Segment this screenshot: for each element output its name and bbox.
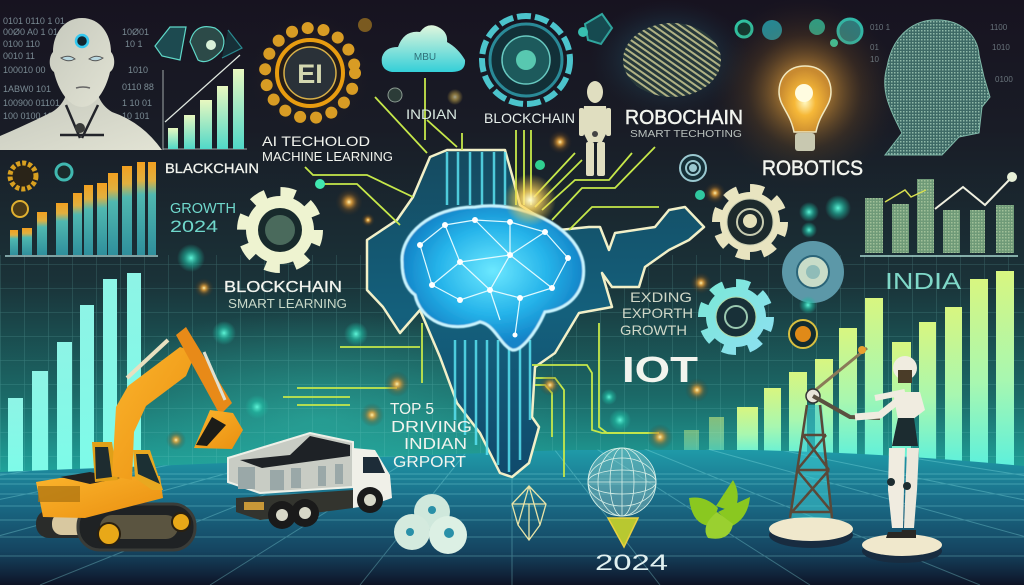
transmission tower on disc [769, 346, 867, 548]
label: exding export growth: GROWTH [620, 322, 687, 338]
third eye [76, 35, 88, 47]
icon: target rings [680, 155, 706, 181]
truck cab [353, 448, 392, 508]
robot head [893, 356, 917, 380]
icon: gold AI emblem [250, 13, 370, 133]
label: growth 2024 [170, 200, 236, 236]
main track [78, 504, 195, 550]
label: exding export growth: EXPORTH [622, 305, 693, 321]
icon: circuit head profile: 1010 [992, 43, 1010, 52]
humanoid robot on disc [813, 356, 942, 563]
label: robochain: ROBOCHAIN [625, 107, 743, 129]
wheels [268, 487, 383, 529]
robot head [50, 18, 114, 107]
robot shoulders [0, 95, 162, 150]
icon: blue medallion [782, 241, 844, 303]
icons: three white orbs [394, 494, 467, 554]
label: exding export growth: EXDING [630, 289, 692, 305]
label: top 5 driving indian export: GRPORT [393, 454, 466, 471]
emblem glyph: EI [297, 59, 323, 89]
icon: orange ring [789, 320, 817, 348]
label: blockchain lower: BLOCKCHAIN [224, 279, 342, 296]
icon: gold gear [10, 163, 36, 189]
icon: wire sphere [588, 448, 656, 516]
icon: circuit head profile: 1100 [990, 23, 1008, 32]
cab [92, 442, 118, 482]
label: 2024: 2024 [595, 550, 668, 575]
text labels [165, 106, 962, 575]
bar chart: India panel [860, 172, 1018, 256]
binary data text: 1ABW0 101 [3, 84, 51, 94]
label: smart technoting: SMART TECHOTING [630, 129, 742, 140]
label: top 5 driving indian export: DRIVING [391, 419, 472, 436]
icon: gold ring [12, 201, 28, 217]
label: exding export growth [620, 289, 693, 338]
bucket [194, 410, 243, 449]
label: blockchain top: BLOCKCHAIN [484, 110, 575, 126]
binary data text: 10 101 [122, 111, 150, 121]
robot collar [60, 105, 104, 138]
roller [52, 513, 107, 535]
label: top 5 driving indian export: TOP 5 [390, 401, 434, 418]
icon: crystal shapes [155, 27, 242, 62]
icon: cloud: MBU [414, 52, 436, 63]
label: indian: INDIAN [406, 106, 457, 122]
binary data text: 0100 110 [3, 39, 40, 49]
icon: wireframe diamond [512, 486, 546, 540]
small growth bar chart [163, 55, 247, 150]
label: growth 2024: 2024 [170, 217, 218, 236]
label: IoT: IOT [622, 349, 698, 390]
excavator body [36, 476, 163, 518]
glow: yellow spark [504, 174, 556, 226]
brain with neural network [402, 206, 584, 350]
mini chart with orange tops [5, 162, 158, 256]
icon: circuit head profile: 10 [870, 55, 879, 64]
binary data text: 0101 0110 1 01 [3, 16, 65, 26]
binary data text: 1010 [128, 65, 148, 75]
icon: circuit head profile: 010 1 [870, 23, 891, 32]
binary data text [3, 16, 154, 121]
binary data text: 100 0100 110 [3, 111, 57, 121]
binary data text: 00Ø0 A0 1 01 [3, 27, 58, 37]
truck chassis [236, 490, 353, 520]
boom [112, 347, 196, 480]
icon: circuit head profile: 0100 [995, 75, 1013, 84]
circuit lines [283, 78, 659, 477]
icon: small humanoid robot [579, 81, 611, 176]
icon: green clover leaf [689, 480, 750, 539]
tower arm [813, 348, 867, 392]
icon: cloud [382, 25, 465, 72]
label: machine learning: MACHINE LEARNING [262, 149, 393, 164]
icon: blockchain wheel [482, 16, 570, 104]
floor with perspective grid [0, 449, 1024, 585]
binary data text: 0010 11 [3, 51, 35, 61]
label: top 5 driving indian export [390, 401, 472, 471]
label: india: INDIA [885, 268, 962, 294]
icon: teal ring [56, 164, 72, 180]
gear: cream right [718, 190, 782, 254]
left aqua bar chart [8, 273, 141, 475]
icon: yellow gem [608, 518, 638, 547]
robot arm reaching [813, 396, 880, 418]
background grid [0, 255, 1024, 470]
icon: fingerprint circuit brain [590, 0, 750, 116]
dump truck [228, 433, 392, 529]
background glow [60, 310, 580, 530]
binary data text: 100010 00 [3, 65, 46, 75]
label: growth 2024: GROWTH [170, 200, 236, 217]
icon: light bulb [710, 0, 900, 187]
engine cover [60, 472, 120, 484]
vertical data lines [447, 152, 530, 472]
label: AI technolod: AI TECHOLOD [262, 133, 370, 149]
binary data text: 10Ø01 [122, 27, 149, 37]
truck bed [228, 433, 353, 493]
right lime bar chart [684, 271, 1014, 468]
rear track [36, 510, 96, 538]
icons: teal status dots [736, 19, 862, 47]
glowing nodes [166, 18, 851, 450]
icon: teal shield [578, 14, 612, 44]
panel: robot portrait with binary data [0, 16, 162, 150]
binary data text: 100900 01101 [3, 98, 60, 108]
label: robotics: ROBOTICS [762, 157, 863, 180]
icon: circuit head profile [870, 20, 1013, 155]
robot torso [892, 392, 925, 445]
icon: circuit head profile: 01 [870, 43, 879, 52]
binary data text: 10 1 [125, 39, 143, 49]
label: blackchain: BLACKCHAIN [165, 160, 259, 176]
binary data text: 0110 88 [122, 82, 154, 92]
arm [176, 327, 232, 415]
label: smart learning: SMART LEARNING [228, 296, 347, 311]
label: top 5 driving indian export: INDIAN [404, 436, 467, 453]
gear: cream left [244, 194, 316, 266]
robot legs [888, 448, 905, 528]
binary data text: 1 10 01 [122, 98, 152, 108]
excavator [36, 327, 243, 550]
robot eyes and mouth [61, 56, 103, 61]
map of India [367, 150, 704, 477]
gear: cyan [704, 285, 768, 349]
